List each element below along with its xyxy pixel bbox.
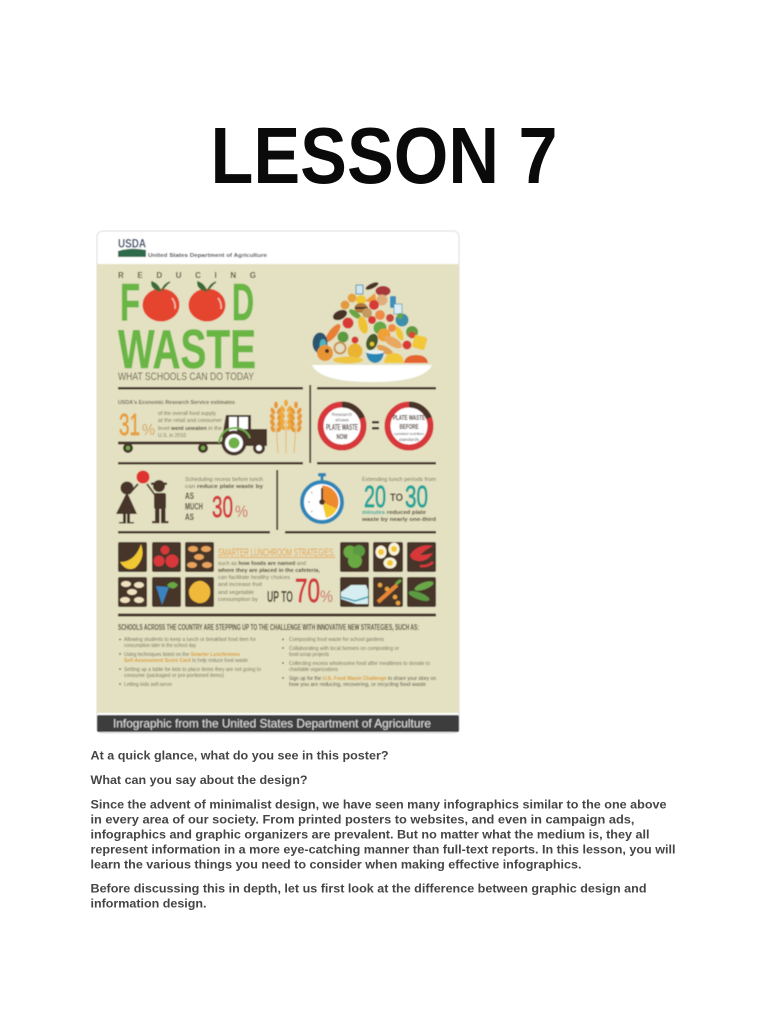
body text: information design. [90, 896, 206, 910]
icon: children with ball [116, 470, 168, 524]
panel: smarter lunchroom strategies: consumption by [218, 597, 258, 603]
panel: recess stat 30 percent: 30 [212, 491, 233, 524]
heading: reducing food waste: WASTE [118, 318, 256, 380]
bullet list: left column: Allowing students to keep a lunch or breakfast food item for [124, 637, 256, 643]
body text: What can you say about the design? [90, 773, 308, 787]
bullet list: right column [282, 637, 436, 688]
panel: smarter lunchroom strategies: such as how foods are named and [218, 561, 306, 567]
panel: 31 percent uneaten: 31 [119, 407, 140, 442]
panel: lunch periods 20 to 30: minutes reduced plate [362, 510, 426, 516]
panel: 31 percent uneaten: U.S. in 2010 [158, 433, 186, 439]
chart: plate waste before ring: BEFORE [400, 422, 418, 431]
bullet list: left column: Letting kids self-serve [124, 682, 172, 688]
caption bar: Infographic from the United States Department of Agriculture [113, 716, 431, 730]
panel: 31 percent uneaten: % [142, 422, 155, 439]
chart: plate waste now ring [320, 404, 364, 448]
heading: reducing food waste: D [232, 274, 254, 332]
panel: 31 percent uneaten: level went uneaten in the [158, 426, 222, 432]
equals sign [372, 421, 379, 430]
title: LESSON 7 [210, 111, 558, 200]
body text: infographics and graphic organizers are prevalent. But no matter what the medium is, they all [90, 828, 650, 842]
heading: reducing food waste: WHAT SCHOOLS CAN DO TODAY [118, 371, 255, 383]
panel: smarter lunchroom strategies: and vegetable [218, 590, 254, 596]
panel: smarter lunchroom strategies [217, 547, 335, 609]
bullet list: left column: Setting up a table for kids to place items they are not going to [124, 667, 261, 673]
icon: wheat [269, 400, 303, 453]
bullet list: right column: how you are reducing, recovering, or recycling food waste [289, 682, 426, 688]
chart: plate waste before ring [388, 404, 430, 448]
bullet list: right column: Collecting excess wholesome food after mealtimes to donate to [289, 661, 430, 667]
icon: stopwatch [302, 473, 342, 522]
panel: recess stat 30 percent: MUCH [185, 502, 203, 512]
bullet list: left column [119, 637, 261, 688]
panel: lunch periods 20 to 30: waste by nearly one-third [361, 517, 436, 523]
body text: Since the advent of minimalist design, we have seen many infographics similar to the one above [90, 798, 667, 812]
heading: reducing food waste [118, 271, 256, 383]
panel: 31 percent uneaten: USDA's Economic Research Service estimates [118, 400, 235, 406]
panel: 31 percent uneaten: at the retail and consumer [158, 418, 222, 424]
bullet list: right column: food-scrap projects [289, 652, 329, 658]
body text [90, 748, 676, 910]
chart: plate waste now ring: Research [332, 412, 353, 418]
chart: plate waste now ring: PLATE WASTE [326, 423, 358, 432]
panel: smarter lunchroom strategies: UP TO [267, 589, 293, 606]
panel: recess stat 30 percent: Scheduling recess before lunch [185, 477, 263, 483]
chart: plate waste before ring: updated nutrition [394, 431, 424, 436]
panel: lunch periods 20 to 30 [361, 477, 436, 523]
USDA logo [118, 236, 267, 259]
body text: At a quick glance, what do you see in this poster? [90, 748, 388, 762]
panel: recess stat 30 percent: AS [185, 491, 194, 502]
body text: represent information in a more eye-catching manner than full-text reports. In this lesson, you will [90, 842, 676, 856]
panel: recess stat 30 percent: can reduce plate waste by [185, 484, 264, 490]
panel: smarter lunchroom strategies: can facilitate healthy choices [218, 575, 290, 581]
dividers [118, 385, 436, 616]
bullet list: left column: Self-Assessment Score Card to help reduce food waste [124, 658, 248, 664]
body text: in every area of our society. From printed posters to websites, and even in campaign ads, [90, 812, 634, 826]
body text: Before discussing this in depth, let us first look at the difference between graphic design and [90, 882, 646, 896]
chart: plate waste before ring: standards [399, 437, 420, 442]
panel: recess stat 30 percent: AS [185, 512, 194, 523]
panel: lunch periods 20 to 30: 20 [364, 479, 386, 514]
panel: smarter lunchroom strategies: % [320, 587, 333, 606]
bullet list: left column: Using techniques listed on the Smarter Lunchrooms [124, 652, 240, 658]
body text: learn the various things you need to consider when making effective infographics. [90, 858, 582, 872]
icon: apple two [188, 282, 226, 322]
panel: 31 percent uneaten: of the overall food supply [158, 411, 216, 417]
bullet list: right column: Sign up for the U.S. Food Waste Challenge to share your story on [289, 676, 436, 682]
bullet list: left column: consume (packaged or pre-portioned items) [124, 673, 224, 679]
panel: recess stat 30 percent [185, 477, 264, 524]
icon: apple one [142, 282, 180, 322]
bullet list: right column: Collaborating with local farmers on composting or [289, 646, 399, 652]
panel: recess stat 30 percent: % [235, 502, 248, 521]
chart: plate waste now ring: NOW [336, 434, 348, 441]
icon: tractor with trailer [118, 415, 267, 456]
bullet list: left column: consumption later in the school day [124, 643, 196, 649]
food tiles: right group [340, 542, 436, 607]
food tiles: left group [118, 542, 214, 607]
panel: lunch periods 20 to 30: 30 [405, 479, 428, 514]
panel: lunch periods 20 to 30: TO [390, 492, 403, 504]
bullet list: right column: charitable organizations [289, 667, 338, 673]
panel: smarter lunchroom strategies: SMARTER LUNCHROOM STRATEGIES, [218, 547, 335, 559]
heading: reducing food waste: REDUCING [118, 271, 256, 280]
panel: smarter lunchroom strategies: 70 [295, 572, 320, 609]
panel: smarter lunchroom strategies: and increase fruit [218, 582, 262, 588]
USDA logo: USDA [118, 236, 146, 250]
food pyramid on plate [312, 281, 432, 382]
heading: reducing food waste: F [120, 274, 140, 332]
bullet list: right column: Composting food waste for school gardens [289, 637, 384, 643]
chart: plate waste before ring: PLATE WASTE [393, 413, 425, 422]
panel: lunch periods 20 to 30: Extending lunch periods from [362, 477, 436, 483]
heading: schools across the country: SCHOOLS ACROSS THE COUNTRY ARE STEPPING UP TO THE CHALLENGE WITH INNOVATIVE NEW STRATEGIES, SUCH AS: [118, 623, 419, 632]
panel: 31 percent uneaten [118, 400, 235, 442]
USDA logo: United States Department of Agriculture [148, 253, 267, 259]
chart: plate waste now ring: shows [335, 418, 349, 424]
poster: reducing food waste [97, 231, 459, 733]
panel: smarter lunchroom strategies: where they are placed in the cafeteria, [217, 568, 320, 574]
